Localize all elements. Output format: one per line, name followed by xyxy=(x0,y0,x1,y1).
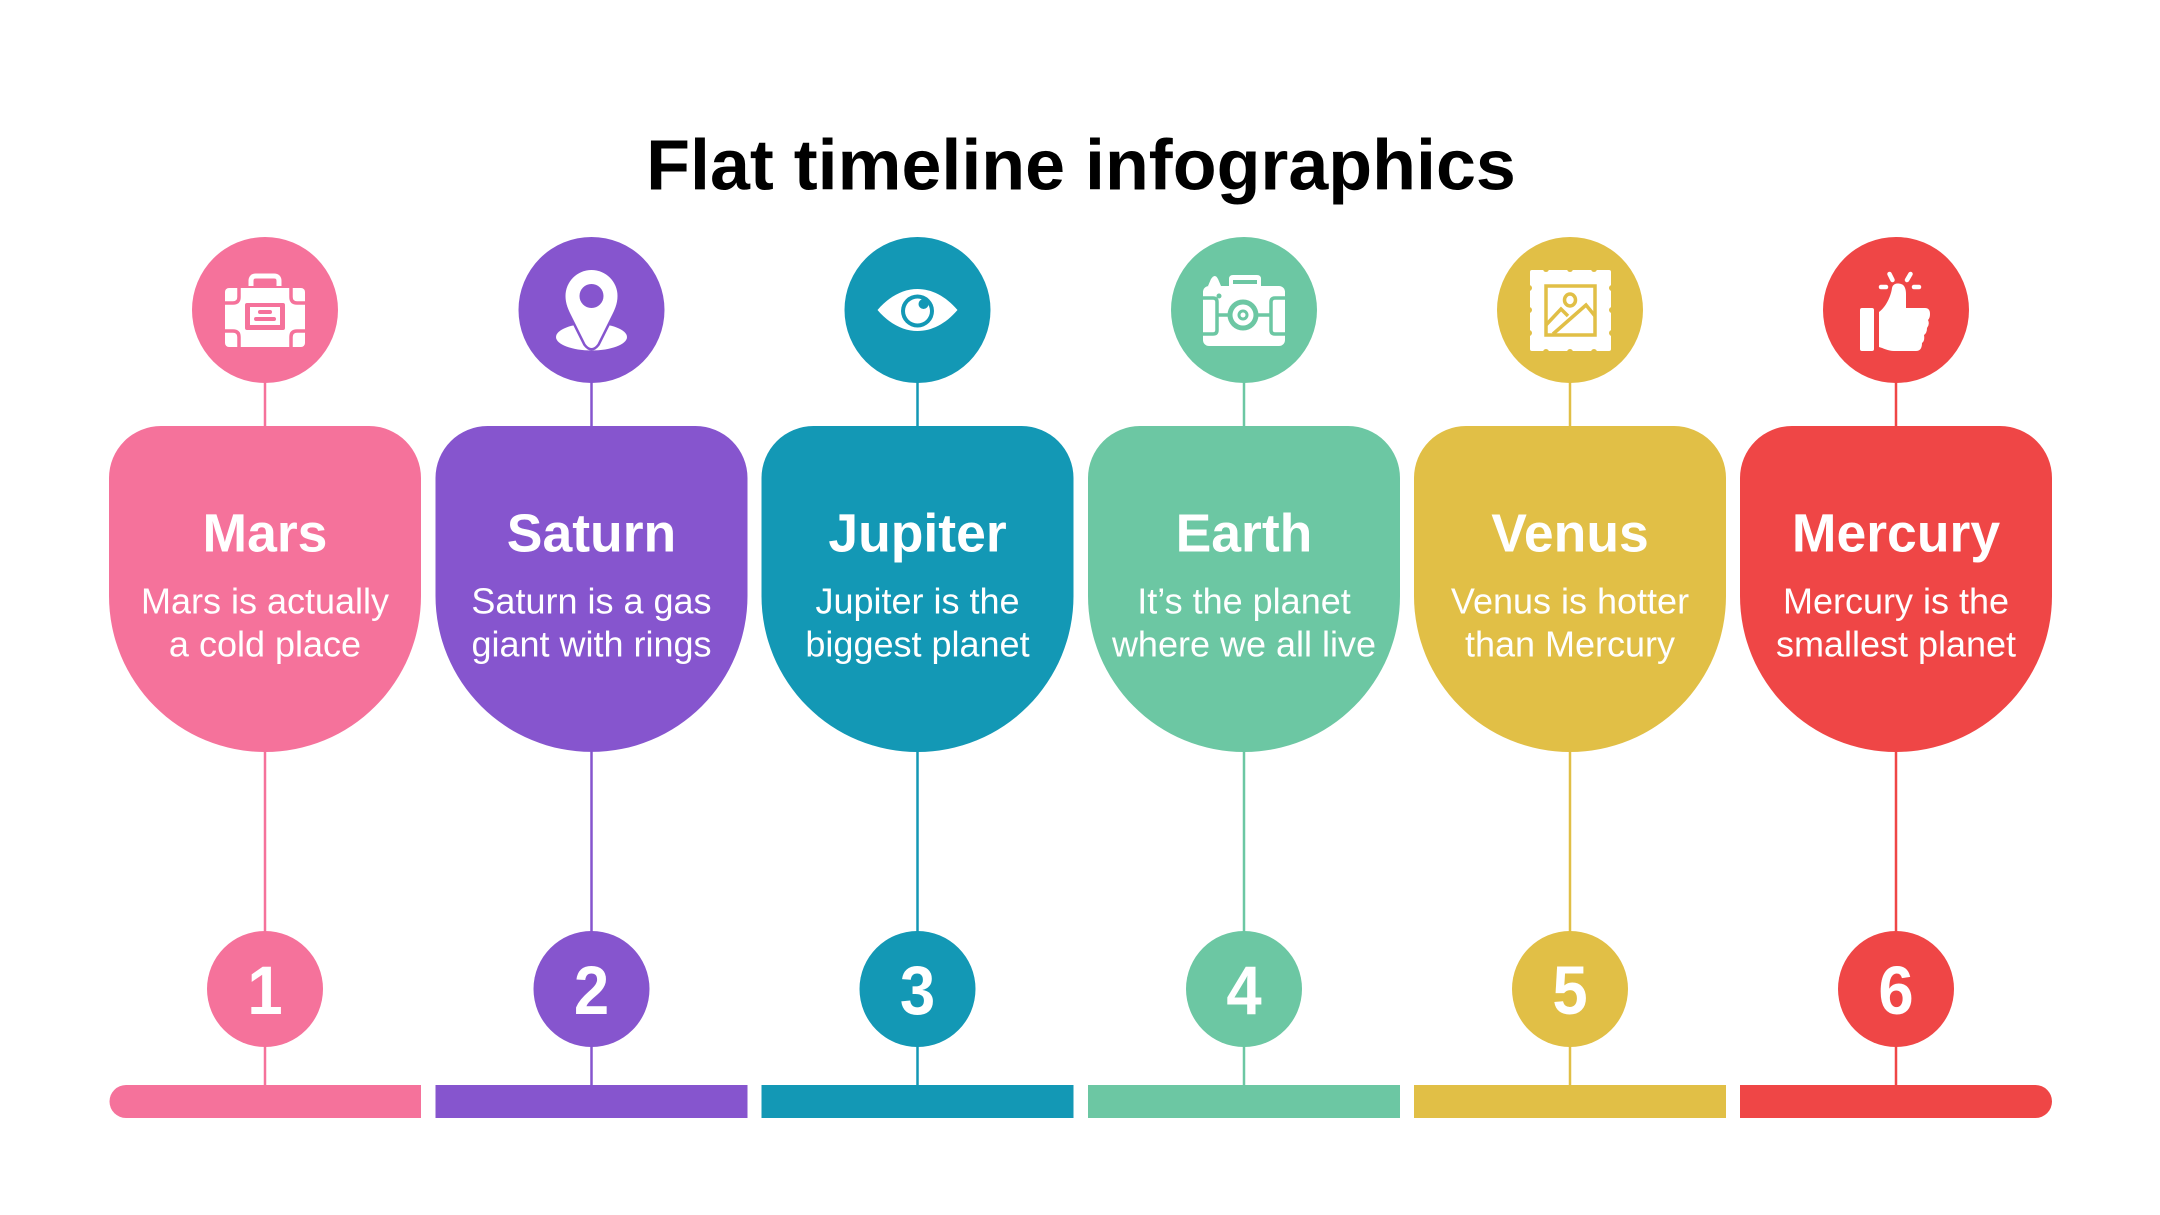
number 4: 4 xyxy=(1226,953,1262,1030)
panel: Venus xyxy=(1414,237,1726,1118)
timeline bar 6 xyxy=(1740,1085,2052,1118)
panel: Jupiter xyxy=(762,237,1074,1118)
number 1 xyxy=(207,931,323,1047)
panel: Mercury xyxy=(1740,237,2052,1118)
number 6 xyxy=(1838,931,1954,1047)
icon: camera xyxy=(1171,237,1317,383)
card: Mars: Mars xyxy=(203,504,327,564)
card: Mercury: Mercury xyxy=(1792,504,2000,564)
number 1: 1 xyxy=(247,953,283,1030)
card: Saturn: Saturn xyxy=(507,504,676,564)
card: Jupiter: Jupiter is the xyxy=(815,580,1020,622)
icon: eye xyxy=(844,237,990,383)
panel: Saturn xyxy=(436,237,748,1118)
card: Mars: a cold place xyxy=(169,624,361,664)
number 5: 5 xyxy=(1552,953,1588,1030)
card: Earth xyxy=(1088,426,1400,752)
timeline bar 2 xyxy=(436,1085,748,1118)
card: Saturn: giant with rings xyxy=(471,624,712,664)
panel: Earth xyxy=(1088,237,1400,1118)
card: Venus: Venus is hotter xyxy=(1451,580,1689,622)
card: Earth: Earth xyxy=(1176,504,1312,564)
card: Mercury: Mercury is the xyxy=(1783,580,2009,622)
card: Mercury: smallest planet xyxy=(1776,624,2016,664)
timeline bar 3 xyxy=(762,1085,1074,1118)
card: Earth: It’s the planet xyxy=(1137,580,1351,622)
number 4 xyxy=(1186,931,1302,1047)
icon: picture stamp xyxy=(1497,237,1643,383)
card: Venus xyxy=(1414,426,1726,752)
icon: thumbs up xyxy=(1823,237,1969,383)
card: Earth: where we all live xyxy=(1111,624,1376,664)
timeline bar 1 xyxy=(110,1085,421,1118)
panel: Mars xyxy=(109,237,421,1118)
number 5 xyxy=(1512,931,1628,1047)
card: Mars xyxy=(109,426,421,752)
number 2 xyxy=(534,931,650,1047)
number 6: 6 xyxy=(1878,953,1914,1030)
card: Jupiter xyxy=(762,426,1074,752)
timeline bar 5 xyxy=(1414,1085,1726,1118)
icon: map pin xyxy=(518,237,664,383)
card: Venus: Venus xyxy=(1491,504,1649,564)
card: Venus: than Mercury xyxy=(1465,624,1675,664)
number 3 xyxy=(860,931,976,1047)
number 2: 2 xyxy=(574,953,609,1030)
title: Flat timeline infographics xyxy=(646,126,1516,206)
card: Jupiter: Jupiter xyxy=(828,504,1007,564)
card: Mars: Mars is actually xyxy=(141,580,389,622)
card: Mercury xyxy=(1740,426,2052,752)
timeline bar 4 xyxy=(1088,1085,1400,1118)
card: Saturn xyxy=(436,426,748,752)
card: Saturn: Saturn is a gas xyxy=(471,580,712,622)
card: Jupiter: biggest planet xyxy=(805,624,1030,664)
number 3: 3 xyxy=(900,953,935,1030)
icon: suitcase xyxy=(192,237,338,383)
